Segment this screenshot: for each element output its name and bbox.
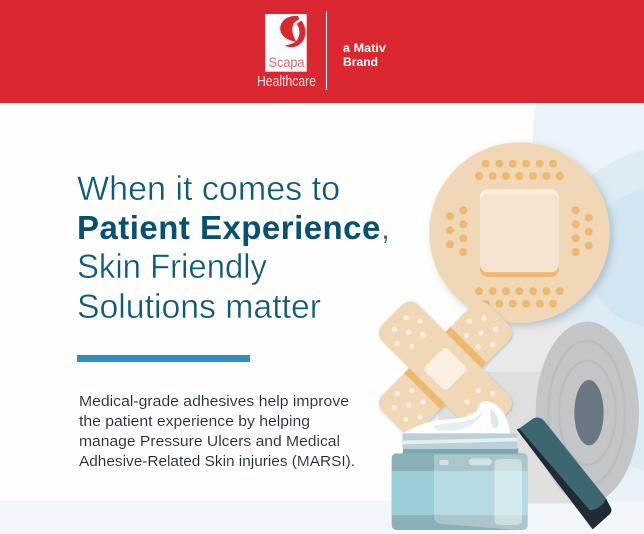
body text [79,393,355,470]
logo: Scapa Healthcare [257,14,316,90]
bandage holes [392,315,498,422]
jar body [392,453,528,530]
brand line: a Mativ [343,43,387,55]
brand line: Brand [343,57,378,69]
logo word: Healthcare: Healthcare [257,74,316,90]
icon: Scapa S mark [280,16,305,47]
bandage strip A [374,297,517,439]
header banner [0,0,644,103]
body text: Medical-grade adhesives help improve [79,393,349,410]
illustration: tape roll [438,322,639,503]
illustration: jar lid / spatula [517,418,612,529]
illustration: cream jar [392,401,528,530]
accent bar [77,355,250,362]
plaster perforations [446,160,593,308]
title: Skin Friendly [77,248,267,286]
title: Patient Experience, [77,209,390,246]
jar neck and lid rim [400,433,518,454]
title [77,170,390,326]
title: Solutions matter [77,288,321,326]
body text: the patient experience by helping [79,413,310,430]
bandage strip B [374,297,517,439]
illustration: cross bandage [374,297,517,439]
body text: Adhesive-Related Skin injuries (MARSI). [79,453,355,470]
cream [403,401,510,433]
bandage pad [423,346,468,392]
title: When it comes to [77,170,340,208]
logo word: Scapa: Scapa [268,54,305,70]
illustration: round plaster [429,142,610,323]
brand line [343,43,387,69]
plaster pad [480,189,559,277]
body text: manage Pressure Ulcers and Medical [79,433,340,450]
